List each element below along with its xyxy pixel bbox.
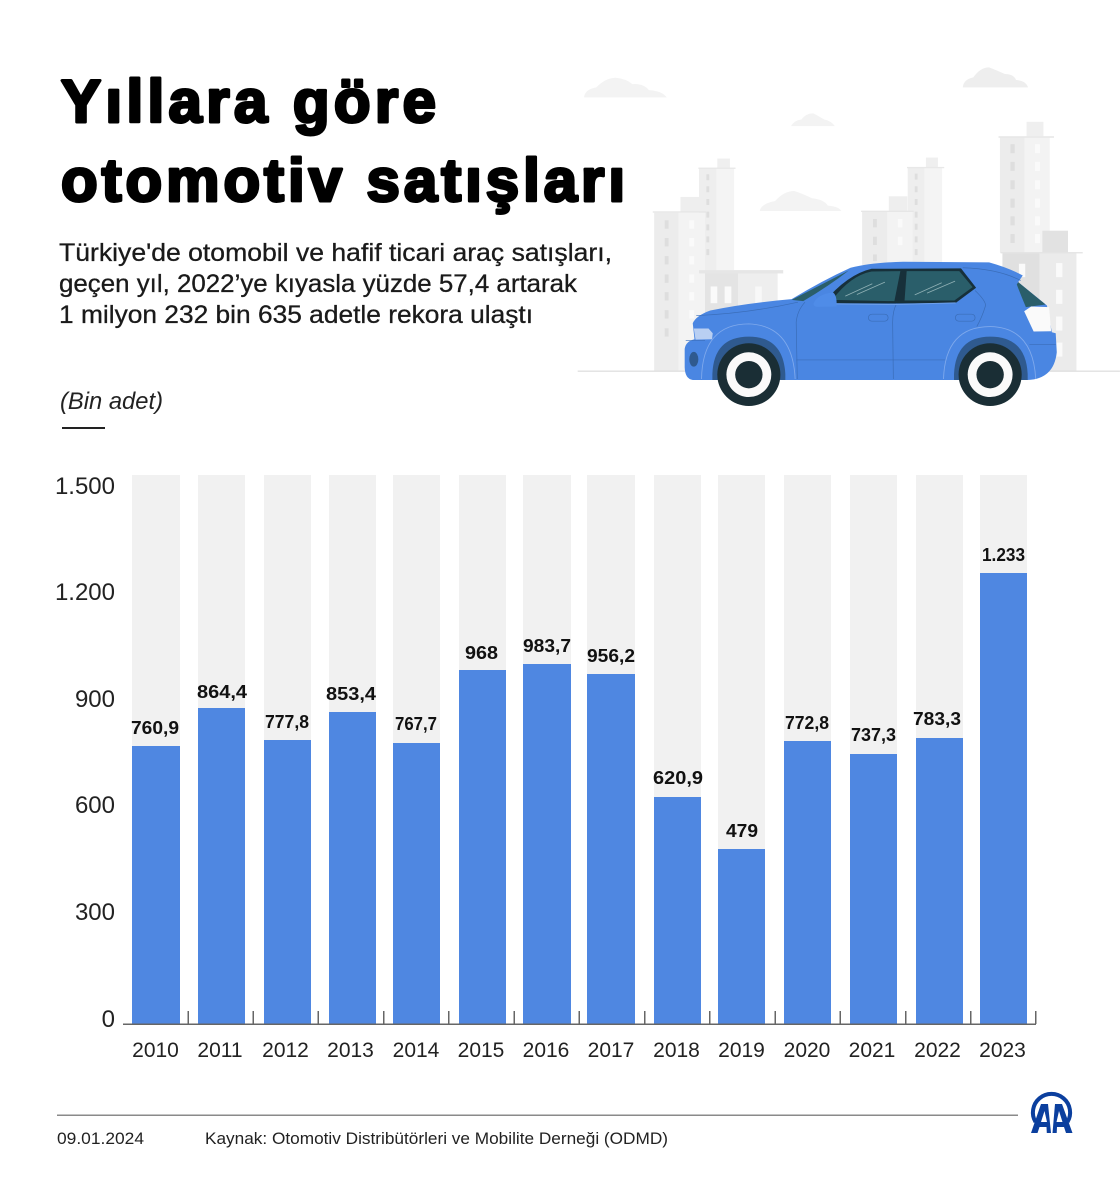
value labels: 1.233 [982, 545, 1025, 565]
unit label [60, 388, 163, 429]
subtitle: Türkiye'de otomobil ve hafif ticari araç satışları, [59, 239, 612, 267]
value labels: 777,8 [265, 712, 309, 732]
year labels: 2013 [327, 1039, 374, 1062]
car [685, 262, 1057, 406]
year labels: 2014 [393, 1039, 440, 1062]
value labels: 864,4 [197, 682, 247, 702]
subtitle: 1 milyon 232 bin 635 adetle rekora ulaştı [59, 301, 533, 329]
value labels: 783,3 [913, 709, 961, 729]
value labels: 767,7 [395, 714, 437, 734]
year labels: 2010 [132, 1039, 179, 1062]
value labels: 772,8 [785, 713, 829, 733]
x axis and ticks [123, 1011, 1036, 1025]
title: Yıllara göre [61, 68, 436, 135]
value labels: 760,9 [131, 718, 179, 738]
y axis labels: 900 [75, 686, 115, 713]
bar chart [55, 473, 1036, 1062]
wheel arches [712, 337, 785, 380]
body lines [686, 268, 1056, 379]
buildings [653, 122, 1083, 371]
year labels: 2018 [653, 1039, 700, 1062]
year labels: 2022 [914, 1039, 961, 1062]
windows [823, 268, 976, 304]
title: otomotiv satışları [61, 147, 625, 214]
year labels: 2016 [523, 1039, 569, 1062]
bars [132, 573, 1027, 1024]
bar backgrounds [132, 475, 1027, 1024]
fog light [689, 352, 698, 367]
y axis labels: 1.500 [55, 473, 115, 500]
value labels: 853,4 [326, 684, 376, 704]
value labels [131, 545, 1025, 841]
year labels: 2021 [849, 1039, 895, 1062]
y axis labels: 600 [75, 792, 115, 819]
year labels: 2012 [262, 1039, 309, 1062]
value labels: 479 [726, 821, 758, 841]
title [61, 68, 625, 214]
headlight [694, 329, 713, 340]
value labels: 968 [465, 643, 498, 663]
year labels: 2019 [718, 1039, 765, 1062]
value labels: 620,9 [653, 768, 703, 788]
y axis labels: 300 [75, 899, 115, 926]
year labels: 2011 [197, 1039, 243, 1062]
subtitle: geçen yıl, 2022’ye kıyasla yüzde 57,4 artarak [59, 270, 578, 298]
year labels: 2017 [588, 1039, 634, 1062]
unit label: (Bin adet) [60, 388, 163, 415]
icon: AA logo [1031, 1094, 1072, 1133]
y axis labels [55, 473, 115, 1033]
y axis labels: 1.200 [55, 579, 115, 606]
ground line [578, 371, 1120, 372]
tail light [1024, 307, 1051, 332]
mirror [813, 292, 837, 307]
value labels: 983,7 [523, 636, 571, 656]
value labels: 956,2 [587, 646, 635, 666]
wheels [717, 343, 1022, 406]
footer [57, 1114, 1018, 1148]
value labels: 737,3 [851, 725, 896, 745]
clouds [584, 67, 1028, 211]
subtitle [59, 239, 612, 329]
illustration: city skyline and car [578, 67, 1120, 406]
year labels: 2015 [458, 1039, 504, 1062]
y axis labels: 0 [102, 1006, 115, 1033]
footer: 09.01.2024 [57, 1129, 144, 1148]
year labels: 2020 [784, 1039, 830, 1062]
year labels: 2023 [979, 1039, 1026, 1062]
year labels [132, 1039, 1026, 1062]
footer: Kaynak: Otomotiv Distribütörleri ve Mobilite Derneği (ODMD) [205, 1129, 668, 1148]
